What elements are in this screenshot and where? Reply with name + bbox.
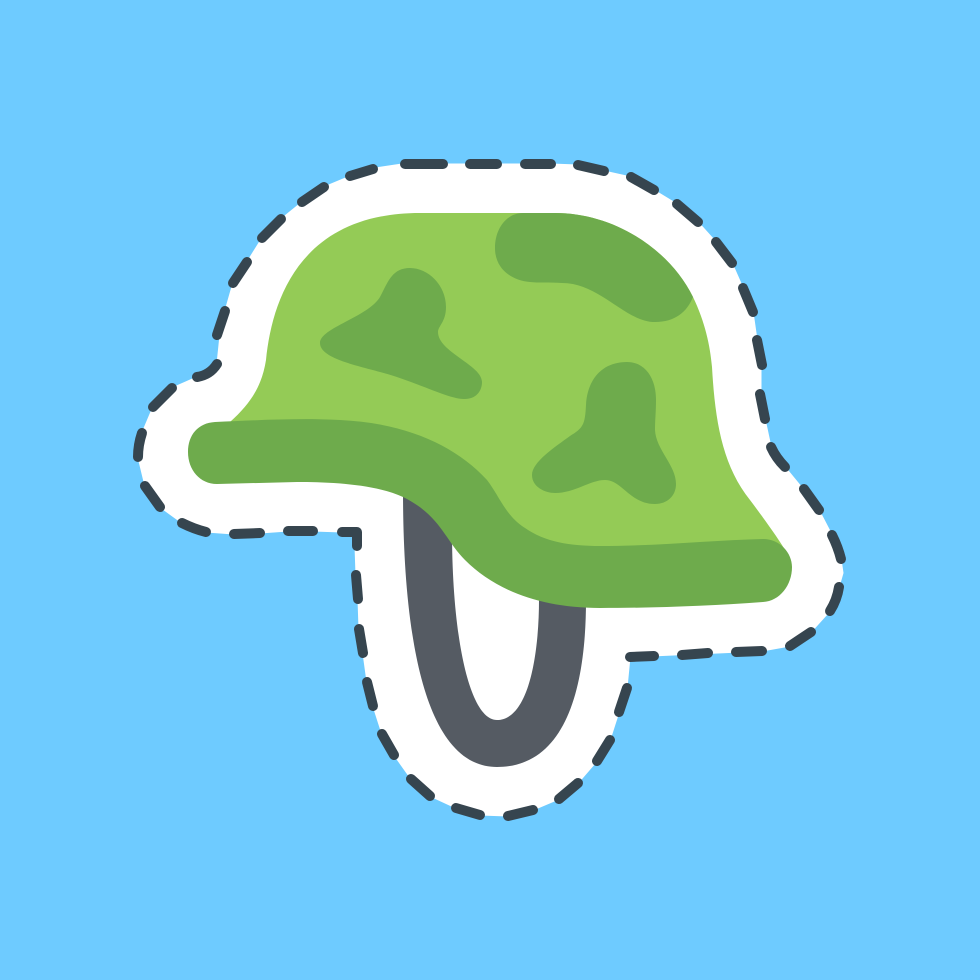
- dashed cut line: [138, 164, 841, 816]
- helmet dome: [230, 213, 787, 590]
- sticker white backing: [138, 164, 843, 816]
- chin strap: [403, 490, 586, 767]
- camouflage patch right: [532, 362, 676, 504]
- camouflage patch top right: [495, 213, 693, 322]
- helmet brim: [188, 419, 792, 608]
- camouflage patch left: [320, 268, 482, 399]
